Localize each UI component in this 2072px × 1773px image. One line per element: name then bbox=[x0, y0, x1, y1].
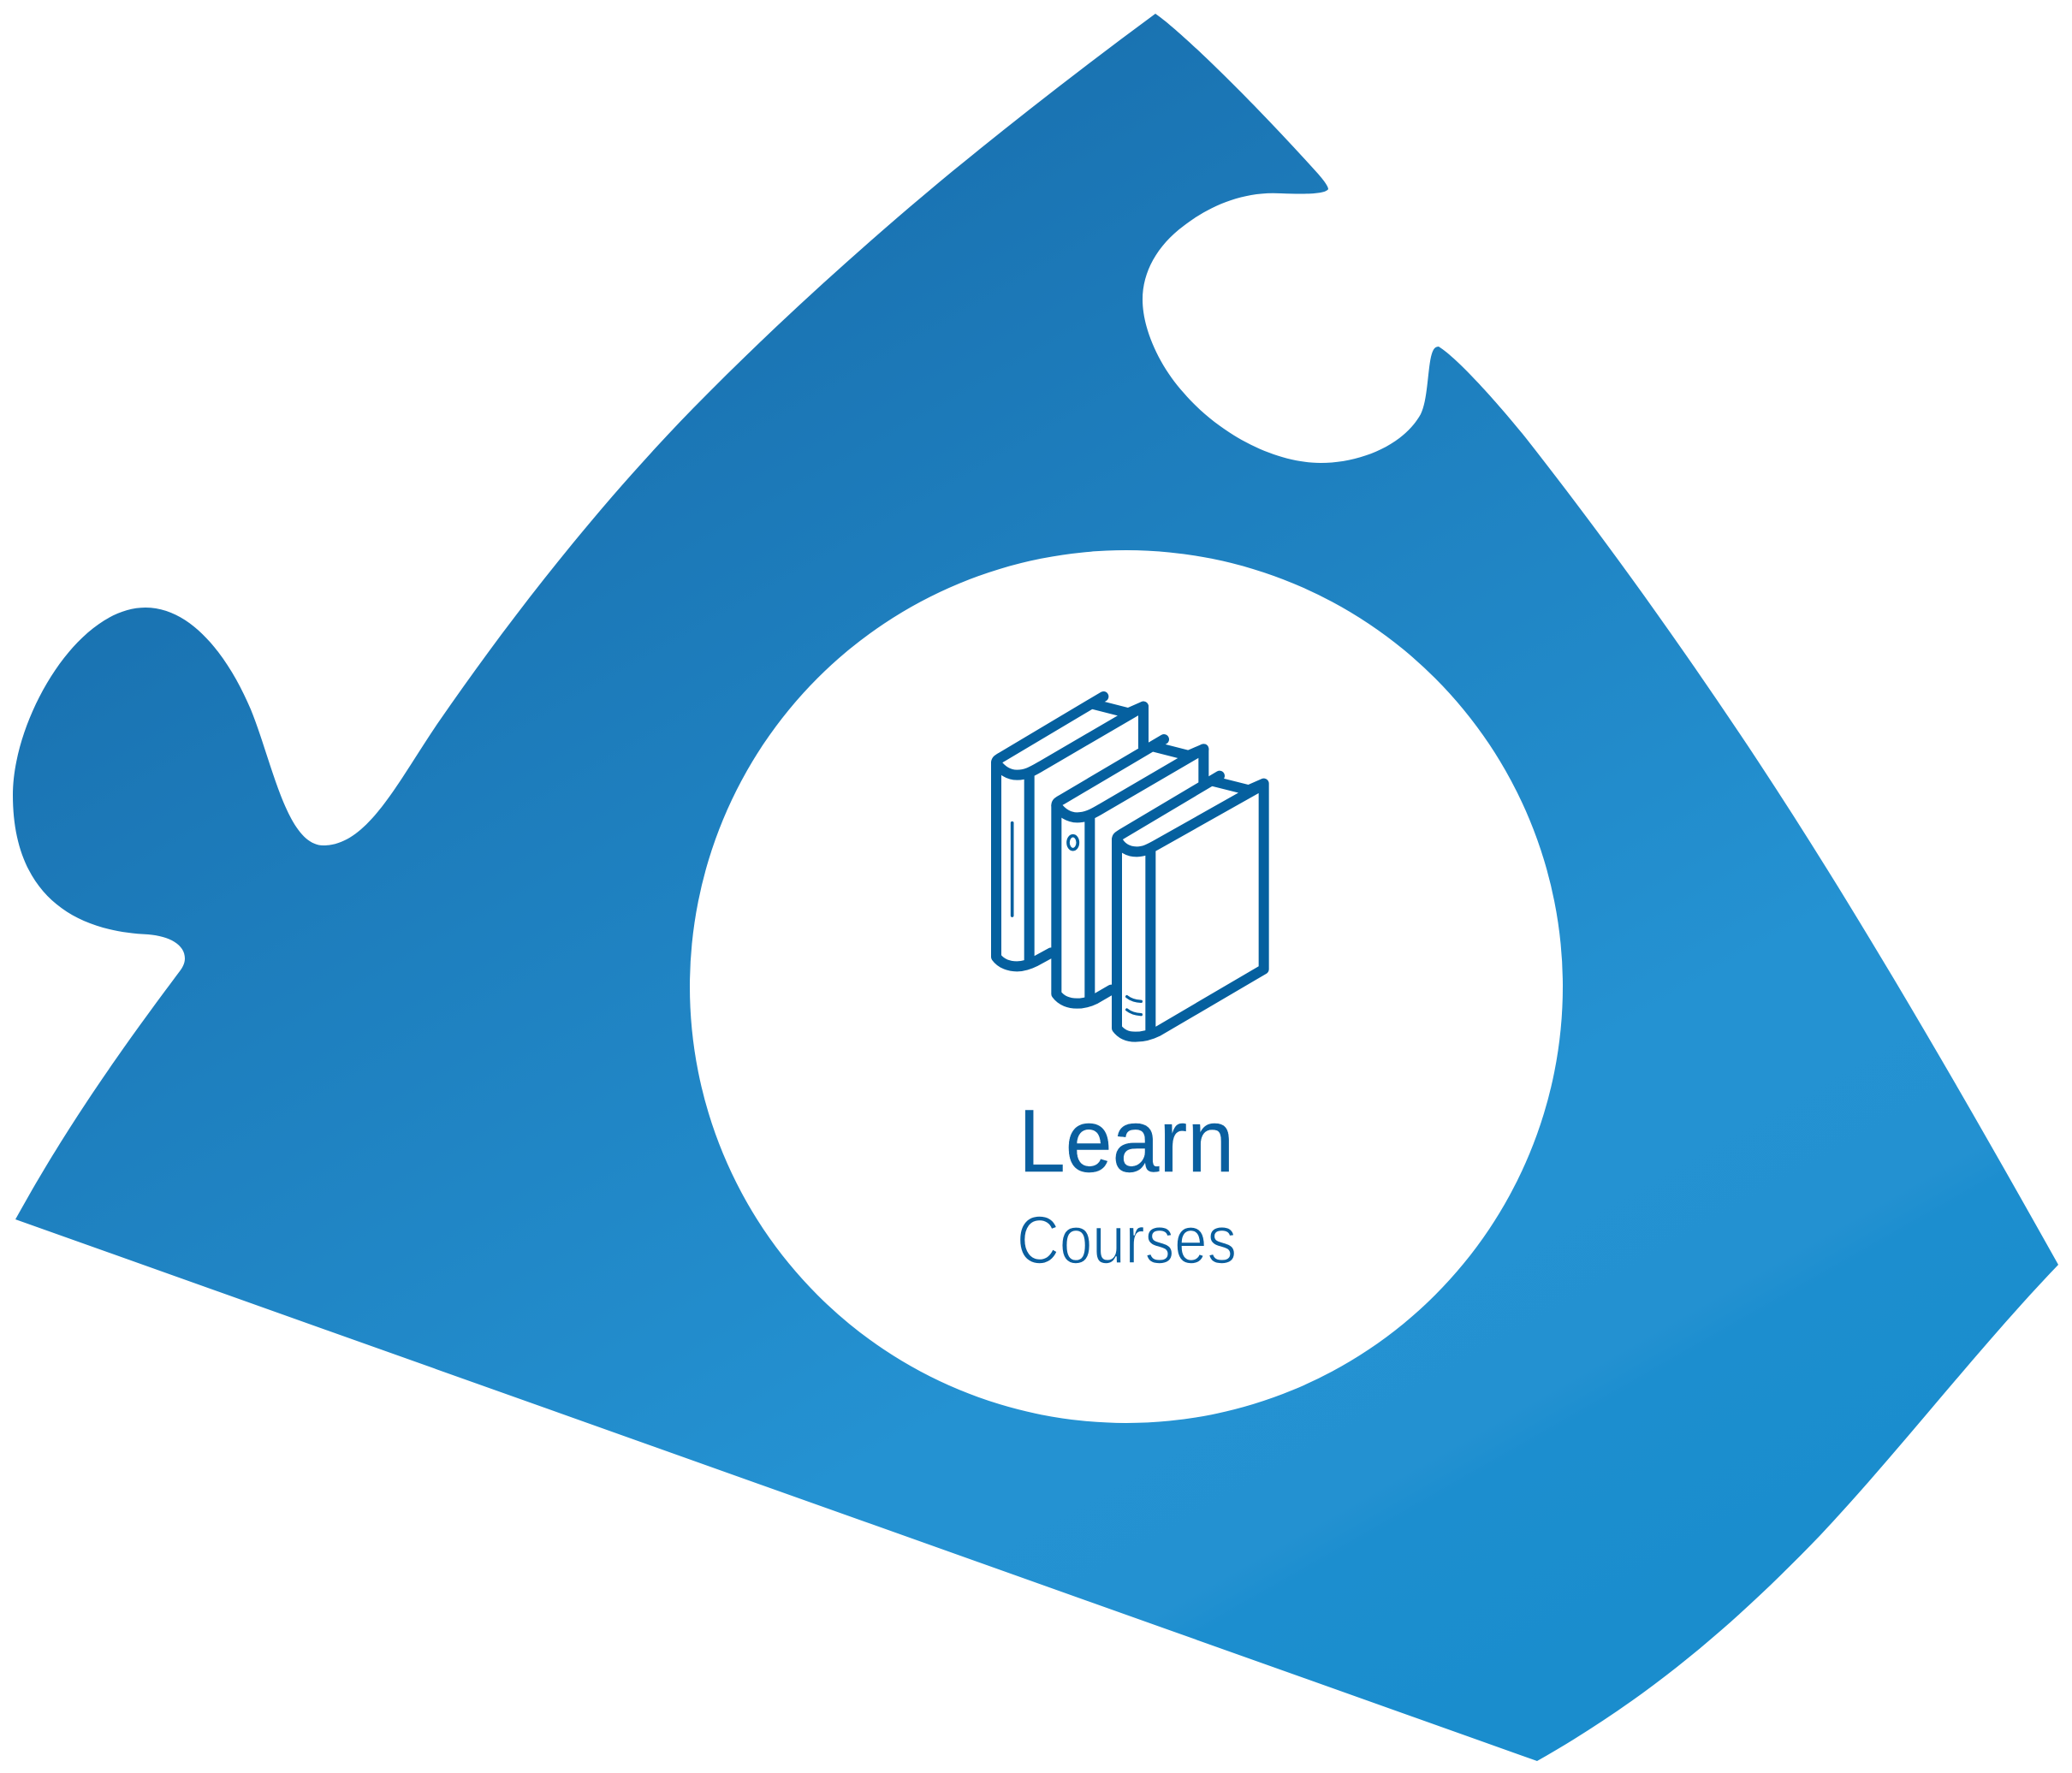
icon: front book bbox=[1117, 776, 1264, 1037]
white center circle bbox=[690, 550, 1563, 1423]
subheading: Courses: Courses bbox=[1017, 1201, 1237, 1278]
icon: back book bbox=[996, 697, 1143, 966]
heading: Learn: Learn bbox=[1018, 1092, 1234, 1191]
icon: books bbox=[996, 697, 1264, 1037]
icon: middle book bbox=[1056, 739, 1203, 1004]
